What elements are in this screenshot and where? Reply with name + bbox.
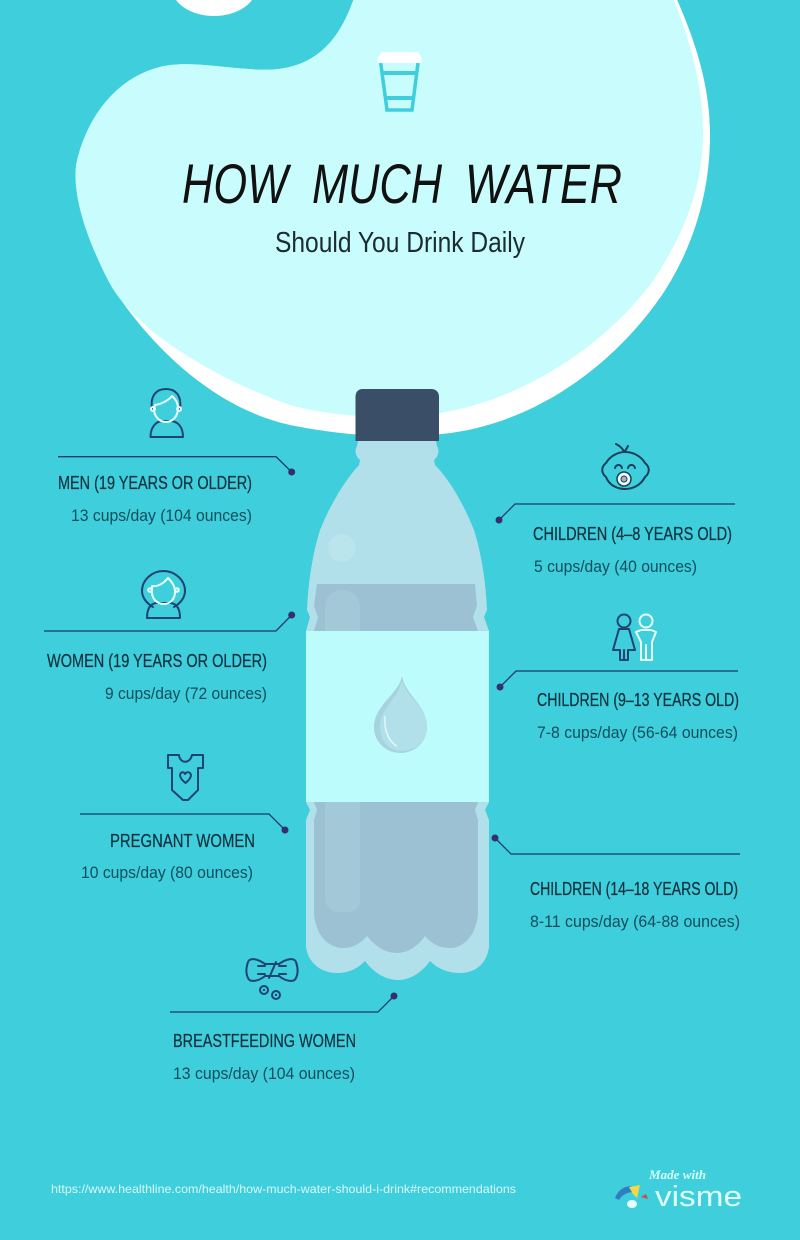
callout: men: 13 cups/day (104 ounces)	[71, 506, 252, 525]
water	[314, 584, 478, 953]
title: MUCH	[312, 152, 442, 215]
callout: women: WOMEN (19 YEARS OR OLDER)	[47, 651, 267, 671]
callout: breastfeeding women: 13 cups/day (104 ounces)	[173, 1064, 355, 1083]
callout: breastfeeding women: BREASTFEEDING WOMEN	[173, 1031, 356, 1051]
small white blob at top	[172, 0, 256, 16]
callout: children 14-18: CHILDREN (14–18 YEARS OLD)	[530, 879, 738, 899]
logo mark	[615, 1185, 648, 1208]
callout: children 14-18	[492, 834, 740, 931]
callout: pregnant women: PREGNANT WOMEN	[110, 831, 255, 851]
callout: children 9-13: CHILDREN (9–13 YEARS OLD)	[537, 690, 739, 710]
callout: women	[44, 571, 295, 703]
bottle cap	[356, 389, 439, 441]
icon: baby	[602, 444, 649, 489]
title	[182, 152, 622, 215]
callout: breastfeeding women	[170, 959, 398, 1083]
callout: men: MEN (19 YEARS OR OLDER)	[58, 473, 252, 493]
highlight bubble	[328, 534, 356, 562]
callout: women: 9 cups/day (72 ounces)	[105, 684, 267, 703]
icon: water drop	[374, 676, 427, 753]
bottle body	[306, 441, 489, 980]
visme logo: Made with	[648, 1167, 706, 1182]
visme logo	[615, 1167, 742, 1213]
callout: children 14-18: 8-11 cups/day (64-88 ounces)	[530, 912, 740, 931]
subtitle: Should You Drink Daily	[275, 227, 525, 259]
header blob	[75, 0, 710, 436]
callout: pregnant women	[80, 755, 288, 882]
callout: children 4-8: 5 cups/day (40 ounces)	[534, 557, 697, 576]
icon: girl and boy	[613, 614, 656, 660]
visme logo: visme	[655, 1181, 742, 1213]
bottle	[306, 389, 489, 980]
icon: woman	[142, 571, 185, 618]
icon: onesie	[168, 755, 203, 800]
icon: bow and buttons	[246, 959, 298, 999]
callout: children 9-13: 7-8 cups/day (56-64 ounces)	[537, 723, 738, 742]
icon: man	[150, 389, 183, 437]
callout: pregnant women: 10 cups/day (80 ounces)	[81, 863, 253, 882]
source url: https://www.healthline.com/health/how-much-water-should-i-drink#recommendations	[51, 1182, 516, 1196]
highlight strip	[325, 590, 360, 912]
bottle label	[306, 631, 489, 802]
callout: men	[58, 389, 295, 525]
callout: children 9-13	[496, 614, 739, 742]
icon: cup	[378, 52, 422, 110]
title: WATER	[465, 152, 622, 215]
title: HOW	[182, 152, 292, 215]
callout: children 4-8	[496, 444, 735, 576]
callout: children 4-8: CHILDREN (4–8 YEARS OLD)	[533, 524, 732, 544]
